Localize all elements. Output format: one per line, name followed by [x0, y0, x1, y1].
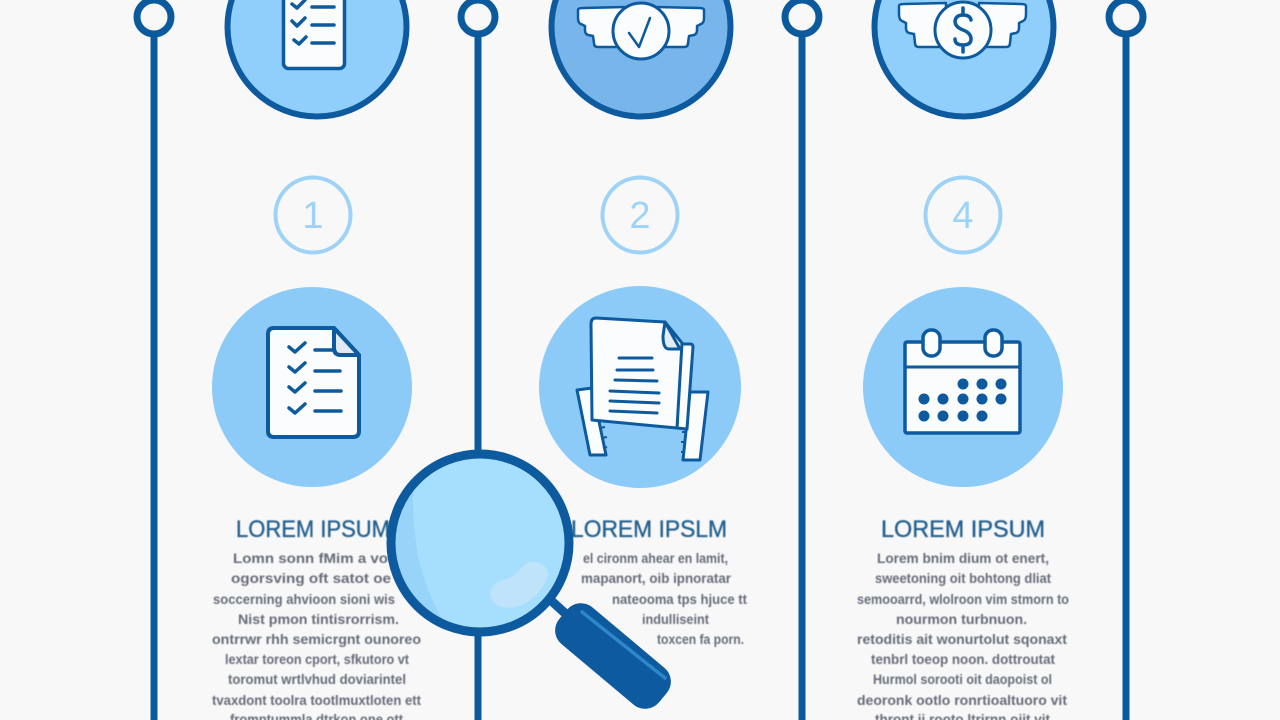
- text block: column 3: retoditis ait wonurtolut sqonaxt: [857, 631, 1067, 647]
- number badge 1: 1: [302, 195, 324, 237]
- number badge 2: 2: [629, 195, 651, 237]
- text block: column 3: sweetoning oit bohtong dliat: [875, 570, 1051, 586]
- icon: documents with rulers: [539, 286, 741, 488]
- text block: column 1: [212, 516, 421, 720]
- text block: column 1: tvaxdont toolra tootlmuxtloten ett: [212, 692, 421, 708]
- text block: column 3: semooarrd, wlolroon vim stmorn to: [857, 591, 1069, 607]
- text block: column 1: ogorsving oft satot oe: [231, 570, 391, 586]
- icon: magnifying glass: [386, 450, 678, 716]
- heading: column 3: LOREM IPSUM: [881, 516, 1045, 543]
- icon: calendar: [863, 287, 1063, 487]
- timeline line 4: [1109, 0, 1143, 720]
- text block: column 3: Lorem bnim dium ot enert,: [877, 550, 1049, 566]
- timeline line 2: [461, 0, 495, 720]
- text block: column 1: ontrrwr rhh semicrgnt ounoreo: [212, 631, 421, 647]
- text block: column 3: nourmon turbnuon.: [896, 611, 1027, 627]
- heading: column 1: LOREM IPSUM: [236, 516, 390, 543]
- icon: top clipboard badge: [228, 0, 406, 116]
- text block: column 1: toromut wrtlvhud doviarintel: [228, 671, 406, 687]
- number badge 1: [276, 178, 350, 252]
- text block: column 1: Lomn sonn fMim a vo: [233, 550, 388, 566]
- text block: column 1: Nist pmon tintisrorrism.: [238, 611, 399, 627]
- text block: column 1: soccerning ahvioon sioni wis: [213, 591, 395, 607]
- timeline line 3: [785, 0, 819, 720]
- text block: column 3: [857, 516, 1069, 720]
- text block: column 2: el cironm ahear en lamit,: [583, 550, 728, 566]
- number badge 4: 4: [952, 195, 974, 237]
- text block: column 3: Hurmol sorooti oit daopoist ol: [873, 671, 1052, 687]
- text block: column 3: tenbrl toeop noon. dottroutat: [871, 651, 1055, 667]
- text block: column 2: nateooma tps hjuce tt: [612, 591, 747, 607]
- number badge 2: [602, 178, 678, 252]
- number badge 4: [926, 178, 1000, 252]
- icon: top winged check badge: [552, 0, 730, 116]
- heading: column 2: LOREM IPSLM: [571, 516, 727, 543]
- text block: column 2: mapanort, oib ipnoratar: [581, 570, 732, 586]
- timeline line 1: [137, 0, 171, 720]
- icon: checklist document: [212, 287, 412, 487]
- text block: column 3: deoronk ootlo ronrtioaltuoro vit: [857, 692, 1067, 708]
- text block: column 2: indulliseint: [642, 611, 709, 627]
- text block: column 2: [571, 516, 747, 647]
- text block: column 1: lextar toreon cport, sfkutoro vt: [225, 651, 409, 667]
- text block: column 2: toxcen fa porn.: [657, 631, 744, 647]
- icon: top winged dollar badge: [874, 0, 1054, 116]
